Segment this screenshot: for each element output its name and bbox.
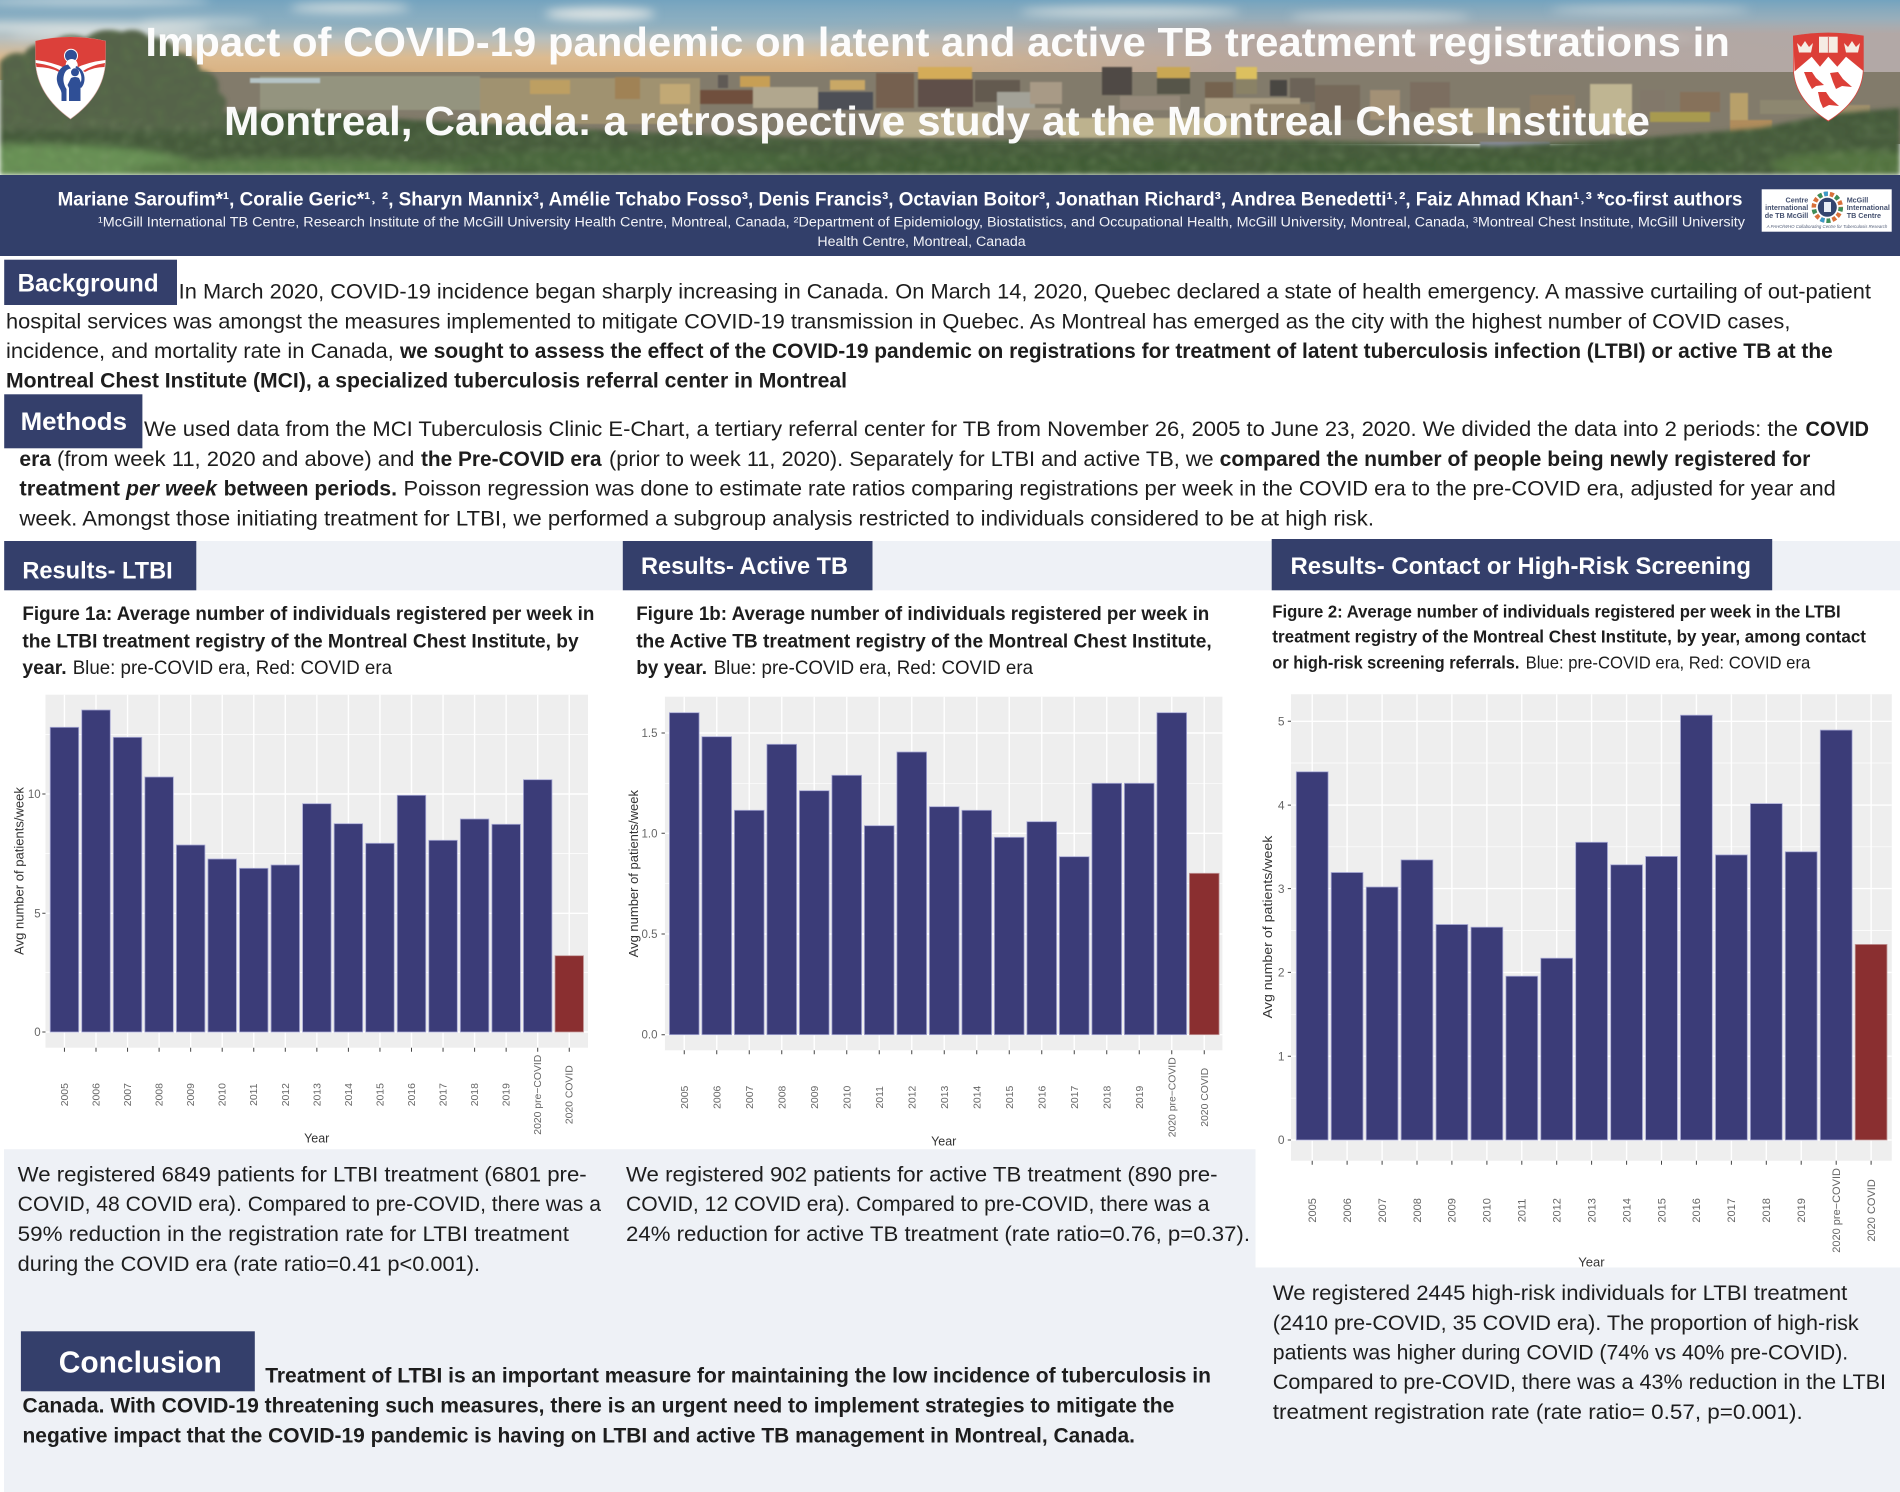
- x axis ticks: 2020 pre−COVID: [1831, 1168, 1843, 1253]
- x axis ticks: 2005: [1307, 1198, 1319, 1223]
- x axis ticks: 2008: [777, 1086, 788, 1109]
- text block: active TB results: COVID, 12 COVID era). Compared to pre-COVID, there was a: [626, 1193, 1210, 1216]
- y axis ticks: 10: [28, 789, 41, 801]
- text block: methods: between periods.: [224, 478, 397, 501]
- authors: Mariane Saroufim*¹, Coralie Geric*¹˒ ², Sharyn Mannix³, Amélie Tchabo Fosso³, Denis Francis³, Octavian Boitor³, Jonathan Richard³, Andrea Benedetti¹˒², Faiz Ahmad Khan¹˒³ *co-first authors: [58, 189, 1743, 211]
- y axis ticks: 3: [1278, 882, 1285, 896]
- caption: figure 2: treatment registry of the Montreal Chest Institute, by year, among contact: [1272, 627, 1866, 647]
- y axis ticks: 0: [1278, 1133, 1285, 1147]
- x axis ticks: 2013: [312, 1083, 323, 1106]
- text block: methods: per week: [125, 478, 218, 501]
- text block: background: we sought to assess the effect of the COVID-19 pandemic on registrations for treatment of latent tuberculosis infection (LTBI) or active TB at the: [399, 340, 1833, 363]
- axis titles: [1260, 835, 1605, 1270]
- text block: methods: week. Amongst those initiating treatment for LTBI, we performed a subgroup analysis restricted to individuals considered to be at high risk.: [18, 508, 1374, 531]
- caption: figure 1a: [22, 603, 594, 679]
- text block: contact screening results: We registered 2445 high-risk individuals for LTBI treatment: [1273, 1282, 1847, 1305]
- x axis ticks: 2018: [1761, 1198, 1773, 1223]
- bar: COVID era: [1189, 873, 1219, 1035]
- x axis ticks: 2011: [1517, 1199, 1529, 1222]
- icon: McGill International TB Centre logo: International: [1847, 203, 1890, 212]
- bar: COVID era: [1855, 944, 1887, 1140]
- x axis ticks: 2007: [1377, 1198, 1389, 1223]
- y axis ticks: [1278, 714, 1291, 1147]
- x axis ticks: 2020 pre−COVID: [533, 1055, 544, 1135]
- x axis ticks: 2010: [842, 1086, 853, 1109]
- x axis ticks: 2017: [1726, 1198, 1738, 1223]
- x axis ticks: 2016: [407, 1083, 418, 1106]
- heading: Results Contact or High-Risk Screening: [1272, 539, 1772, 590]
- caption: figure 2: Figure 2: Average number of individuals registered per week in the LTBI: [1272, 602, 1841, 622]
- x axis ticks: 2010: [218, 1083, 229, 1106]
- x axis ticks: 2006: [92, 1083, 102, 1106]
- x axis ticks: 2013: [940, 1086, 951, 1109]
- y axis ticks: 5: [34, 908, 41, 920]
- x axis ticks: 2015: [1656, 1198, 1668, 1223]
- text block: methods: [18, 418, 1869, 531]
- panel: header banner photo of Montreal skyline: [0, 0, 1900, 192]
- x axis ticks: 2012: [907, 1086, 918, 1109]
- x axis ticks: 2011: [249, 1083, 260, 1106]
- x axis ticks: 2011: [875, 1086, 886, 1108]
- x axis ticks: 2016: [1037, 1086, 1048, 1109]
- x axis ticks: 2008: [1412, 1198, 1424, 1223]
- caption: figure 1a: Blue: pre-COVID era, Red: COVID era: [73, 657, 392, 679]
- heading: Methods: Methods: [21, 408, 127, 436]
- axis titles: Avg number of patients/week: [12, 786, 26, 955]
- bar: COVID era: [555, 956, 584, 1032]
- icon: McGill International TB Centre logo: [1762, 189, 1892, 232]
- caption: figure 1b: [636, 603, 1212, 679]
- y axis ticks: 0: [34, 1027, 41, 1039]
- text block: methods: (from week 11, 2020 and above) and: [57, 448, 414, 471]
- y axis ticks: 5: [1278, 714, 1285, 728]
- text block: conclusion: negative impact that the COVID-19 pandemic is having on LTBI and active TB management in Montreal, Canada.: [22, 1424, 1135, 1447]
- x axis ticks: 2017: [1070, 1086, 1081, 1109]
- text block: LTBI results: COVID, 48 COVID era). Compared to pre-COVID, there was a: [18, 1193, 601, 1216]
- text block: conclusion: Canada. With COVID-19 threatening such measures, there is an urgent need to implement strategies to mitigate the: [22, 1395, 1174, 1418]
- text block: LTBI results: 59% reduction in the registration rate for LTBI treatment: [18, 1223, 569, 1246]
- text block: active TB results: [626, 1164, 1250, 1246]
- caption: figure 1b: the Active TB treatment registry of the Montreal Chest Institute,: [636, 630, 1212, 652]
- bars: pre-COVID era: [1296, 715, 1852, 1140]
- text block: active TB results: 24% reduction for active TB treatment (rate ratio=0.76, p=0.37).: [626, 1223, 1250, 1246]
- x axis ticks: 2016: [1691, 1198, 1703, 1223]
- bar chart: figure 1a LTBI registrations: [12, 695, 588, 1146]
- heading: Background: Background: [18, 270, 159, 298]
- x axis ticks: 2018: [1102, 1086, 1113, 1109]
- x axis ticks: 2014: [344, 1083, 355, 1106]
- axis titles: [12, 786, 329, 1146]
- bar chart: figure 1b active TB registrations: [627, 697, 1222, 1148]
- x axis ticks: 2007: [123, 1083, 134, 1106]
- x axis ticks: 2019: [502, 1083, 513, 1106]
- caption: figure 1b: Blue: pre-COVID era, Red: COVID era: [714, 657, 1033, 679]
- affiliations: [98, 215, 1745, 249]
- panel: authors band: [0, 175, 1900, 256]
- panel: results background: [4, 541, 1900, 1492]
- y axis ticks: 1.5: [642, 728, 658, 740]
- text block: methods: era: [19, 448, 51, 471]
- x axis ticks: 2019: [1135, 1086, 1146, 1109]
- axis titles: Avg number of patients/week: [627, 789, 641, 957]
- text block: methods: Poisson regression was done to estimate rate ratios comparing registrations per week in the COVID era to the pre-COVID era, adjusted for year and: [404, 478, 1836, 501]
- text block: methods: We used data from the MCI Tuberculosis Clinic E-Chart, a tertiary referral center for TB from November 26, 2005 to June 23, 2020. We divided the data into 2 periods: the: [144, 418, 1798, 441]
- text block: background: incidence, and mortality rate in Canada,: [6, 340, 394, 363]
- heading: Results Active TB: Results- Active TB: [641, 553, 848, 580]
- title: [145, 19, 1730, 144]
- x axis ticks: 2012: [1552, 1198, 1564, 1223]
- text block: methods: (prior to week 11, 2020). Separately for LTBI and active TB, we: [609, 448, 1214, 471]
- axis titles: Year: [1578, 1254, 1605, 1270]
- text block: LTBI results: We registered 6849 patients for LTBI treatment (6801 pre-: [18, 1164, 587, 1187]
- x axis ticks: [1307, 1161, 1878, 1253]
- x axis ticks: 2015: [375, 1083, 386, 1106]
- caption: figure 2: Blue: pre-COVID era, Red: COVID era: [1526, 652, 1811, 672]
- text block: contact screening results: (2410 pre-COVID, 35 COVID era). The proportion of high-risk: [1273, 1312, 1859, 1335]
- text block: background: In March 2020, COVID-19 incidence began sharply increasing in Canada. On March 14, 2020, Quebec declared a state of health emergency. A massive curtailing of out-patient: [179, 280, 1871, 303]
- x axis ticks: 2005: [680, 1086, 691, 1109]
- axis titles: [627, 789, 956, 1148]
- x axis ticks: 2018: [470, 1083, 481, 1106]
- text block: background: [6, 280, 1871, 393]
- text block: contact screening results: patients was higher during COVID (74% vs 40% pre-COVID).: [1273, 1341, 1848, 1364]
- icon: McGill International TB Centre logo: A PAHO/WHO Collaborating Centre for Tuberculosis Research: [1766, 224, 1888, 230]
- y axis ticks: [642, 728, 665, 1042]
- x axis ticks: 2006: [1342, 1198, 1354, 1223]
- x axis ticks: 2008: [155, 1083, 166, 1106]
- caption: figure 1a: year.: [22, 657, 67, 679]
- x axis ticks: 2020 COVID: [1866, 1179, 1878, 1242]
- text block: methods: treatment: [19, 478, 120, 501]
- text block: methods: compared the number of people being newly registered for: [1220, 448, 1810, 471]
- caption: figure 1a: the LTBI treatment registry of the Montreal Chest Institute, by: [22, 630, 579, 652]
- text block: contact screening results: Compared to pre-COVID, there was a 43% reduction in the LTBI: [1273, 1371, 1886, 1394]
- heading: Results LTBI: [4, 541, 196, 590]
- x axis ticks: [680, 1050, 1211, 1137]
- x axis ticks: 2019: [1796, 1198, 1808, 1223]
- x axis ticks: 2012: [281, 1083, 292, 1106]
- heading: Results LTBI: Results- LTBI: [22, 557, 173, 584]
- heading: Conclusion: [21, 1331, 255, 1391]
- text block: methods: the Pre-COVID era: [421, 448, 602, 471]
- x axis ticks: 2009: [186, 1083, 197, 1106]
- x axis ticks: 2020 COVID: [565, 1065, 576, 1124]
- x axis ticks: 2014: [972, 1086, 983, 1109]
- title: Impact of COVID-19 pandemic on latent and active TB treatment registrations in: [145, 19, 1730, 65]
- heading: Results Contact or High-Risk Screening: Results- Contact or High-Risk Screening: [1290, 553, 1751, 580]
- axis titles: Year: [304, 1132, 329, 1146]
- x axis ticks: 2017: [438, 1083, 450, 1106]
- caption: figure 1b: Figure 1b: Average number of individuals registered per week in: [636, 603, 1209, 625]
- bar chart: figure 2 contact or high-risk screening registrations: [1260, 694, 1892, 1270]
- y axis ticks: [28, 789, 46, 1039]
- y axis ticks: 4: [1278, 798, 1285, 812]
- heading: Conclusion: Conclusion: [59, 1346, 222, 1380]
- x axis ticks: 2013: [1586, 1198, 1598, 1223]
- text block: background: Montreal Chest Institute (MCI), a specialized tuberculosis referral center in Montreal: [6, 370, 847, 393]
- text block: contact screening results: treatment registration rate (rate ratio= 0.57, p=0.001).: [1273, 1401, 1803, 1424]
- axis titles: Avg number of patients/week: [1260, 835, 1275, 1018]
- heading: Methods: [4, 394, 142, 448]
- text block: background: hospital services was amongst the measures implemented to mitigate COVID-19 transmission in Quebec. As Montreal has emerged as the city with the highest number of COVID cases,: [6, 310, 1790, 333]
- x axis ticks: 2009: [810, 1086, 821, 1109]
- x axis ticks: 2006: [712, 1086, 723, 1109]
- heading: Results Active TB: [623, 541, 872, 590]
- icon: McGill International TB Centre logo: McGill: [1847, 196, 1868, 205]
- icon: left institute shield logo: [36, 37, 106, 119]
- text block: LTBI results: during the COVID era (rate ratio=0.41 p<0.001).: [18, 1253, 480, 1276]
- x axis ticks: 2014: [1621, 1198, 1633, 1223]
- caption: figure 2: [1272, 602, 1866, 672]
- text block: conclusion: Treatment of LTBI is an important measure for maintaining the low incidence of tuberculosis in: [265, 1364, 1211, 1387]
- text block: LTBI results: [18, 1164, 601, 1276]
- title: Montreal, Canada: a retrospective study at the Montreal Chest Institute: [224, 98, 1650, 144]
- y axis ticks: 0.5: [642, 929, 658, 941]
- y axis ticks: 1: [1278, 1049, 1285, 1063]
- x axis ticks: 2009: [1447, 1198, 1459, 1223]
- x axis ticks: 2020 pre−COVID: [1167, 1057, 1178, 1137]
- icon: McGill International TB Centre logo: de TB McGill: [1765, 211, 1808, 220]
- x axis ticks: 2010: [1482, 1198, 1494, 1223]
- bars: pre-COVID era: [669, 713, 1187, 1035]
- icon: McGill International TB Centre logo: international: [1765, 203, 1808, 212]
- x axis ticks: 2020 COVID: [1200, 1068, 1211, 1127]
- bars: pre-COVID era: [50, 710, 552, 1032]
- caption: figure 1b: by year.: [636, 657, 707, 679]
- affiliations: ¹McGill International TB Centre, Research Institute of the McGill University Health Centre, Montreal, Canada, ²Department of Epidemiology, Biostatistics, and Occupational Health, McGill University, Montreal, Canada, ³Montreal Chest Institute, McGill University: [98, 215, 1745, 230]
- caption: figure 1a: Figure 1a: Average number of individuals registered per week in: [22, 603, 594, 625]
- affiliations: Health Centre, Montreal, Canada: [817, 234, 1026, 249]
- icon: McGill International TB Centre logo: TB Centre: [1847, 211, 1881, 220]
- x axis ticks: 2007: [745, 1086, 756, 1109]
- axis titles: Year: [931, 1134, 956, 1148]
- y axis ticks: 1.0: [642, 828, 658, 840]
- y axis ticks: 0.0: [642, 1030, 658, 1042]
- text block: conclusion: [22, 1364, 1211, 1447]
- icon: McGill International TB Centre logo: Centre: [1786, 196, 1808, 205]
- caption: figure 2: or high-risk screening referrals.: [1272, 652, 1520, 672]
- x axis ticks: [60, 1048, 576, 1135]
- text block: methods: COVID: [1806, 418, 1869, 441]
- text block: contact screening results: [1273, 1282, 1886, 1424]
- icon: McGill shield logo: [1793, 33, 1863, 121]
- x axis ticks: 2015: [1005, 1086, 1016, 1109]
- y axis ticks: 2: [1278, 966, 1285, 980]
- x axis ticks: 2005: [60, 1083, 71, 1106]
- heading: Background: [4, 260, 177, 305]
- text block: active TB results: We registered 902 patients for active TB treatment (890 pre-: [626, 1164, 1218, 1187]
